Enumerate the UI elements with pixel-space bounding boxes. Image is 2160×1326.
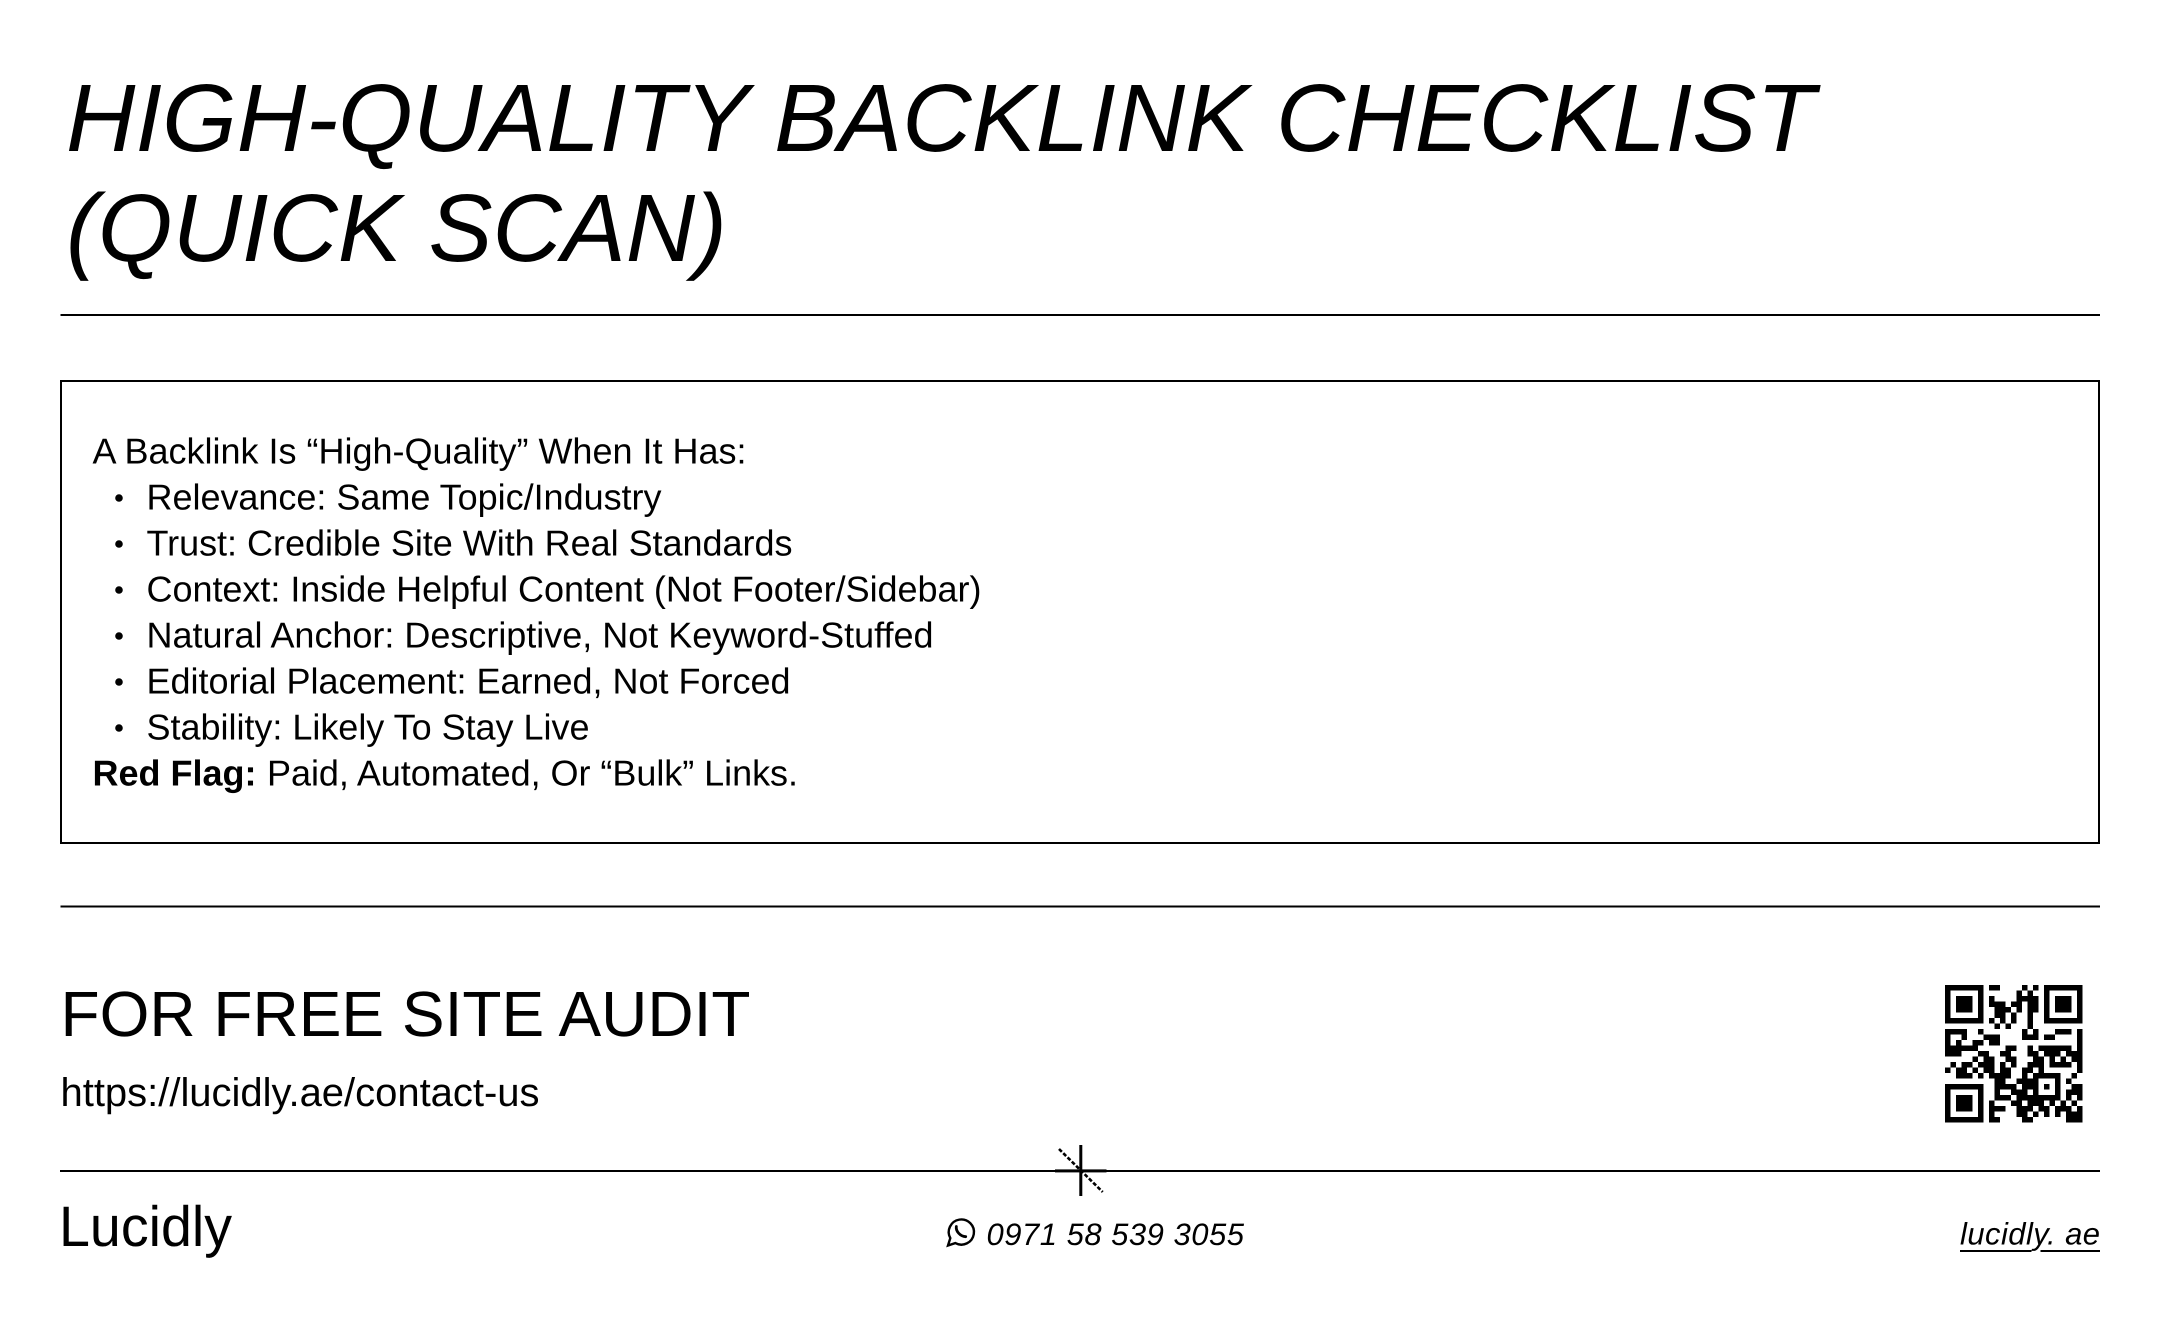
panel border	[61, 381, 2099, 843]
panel: checklist	[61, 381, 2099, 843]
item: natural anchor: Natural Anchor: Descriptive, Not Keyword-Stuffed	[146, 614, 934, 656]
item: editorial placement: Editorial Placement: Earned, Not Forced	[146, 660, 790, 702]
checklist heading: A Backlink Is “High-Quality” When It Has:	[92, 430, 746, 472]
title	[66, 65, 1821, 282]
qr code	[1945, 985, 2082, 1122]
phone contact	[948, 1217, 1245, 1252]
website link: lucidly. ae	[1960, 1216, 2100, 1252]
item: context: Context: Inside Helpful Content (Not Footer/Sidebar)	[146, 568, 982, 610]
item: trust: Trust: Credible Site With Real Standards	[146, 522, 792, 564]
icon: asterisk cross	[1055, 1145, 1106, 1196]
item: relevance: Relevance: Same Topic/Industry	[146, 476, 662, 518]
red flag note: Paid, Automated, Or “Bulk” Links.	[267, 752, 798, 794]
title: HIGH-QUALITY BACKLINK CHECKLIST	[66, 65, 1821, 172]
item: stability: Stability: Likely To Stay Live	[146, 706, 590, 748]
contact url: https://lucidly.ae/contact-us	[60, 1071, 540, 1115]
red flag note: Red Flag:	[92, 752, 256, 794]
heading: for free site audit: FOR FREE SITE AUDIT	[60, 978, 750, 1050]
logo: Lucidly: Lucidly	[59, 1195, 232, 1259]
phone number: 0971 58 539 3055	[986, 1217, 1245, 1252]
icon: whatsapp	[948, 1219, 974, 1246]
title: (QUICK SCAN)	[66, 175, 727, 282]
